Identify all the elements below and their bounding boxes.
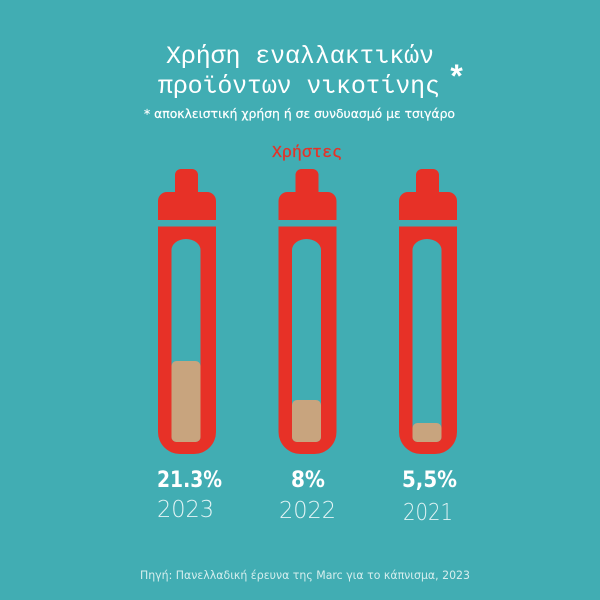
label 2022: 8%	[291, 468, 325, 493]
device 2021	[399, 169, 457, 454]
label 2021: 5,5%	[402, 468, 457, 493]
level 5,5%	[412, 423, 442, 442]
chart heading: users: Χρήστες	[272, 143, 342, 162]
title	[158, 42, 440, 101]
label 2021	[402, 468, 457, 526]
label 2022: 2022	[279, 498, 336, 524]
level 21.3%	[172, 361, 200, 442]
device 2022	[278, 169, 336, 454]
label 2023	[157, 468, 222, 523]
level 8%	[292, 400, 321, 442]
bar chart: vape devices	[158, 169, 457, 454]
label 2023: 21.3%	[157, 468, 222, 493]
subtitle note: * αποκλειστική χρήση ή σε συνδυασμό με τσιγάρο	[144, 107, 455, 121]
title: προϊόντων νικοτίνης	[158, 72, 440, 101]
device 2023	[158, 169, 216, 454]
label 2022	[279, 468, 336, 524]
title asterisk: *	[447, 61, 466, 98]
source note: Πηγή: Πανελλαδική έρευνα της Marc για το κάπνισμα, 2023	[140, 568, 470, 582]
label 2023: 2023	[157, 497, 214, 523]
label 2021: 2021	[403, 500, 453, 526]
title: Χρήση εναλλακτικών	[166, 42, 434, 71]
